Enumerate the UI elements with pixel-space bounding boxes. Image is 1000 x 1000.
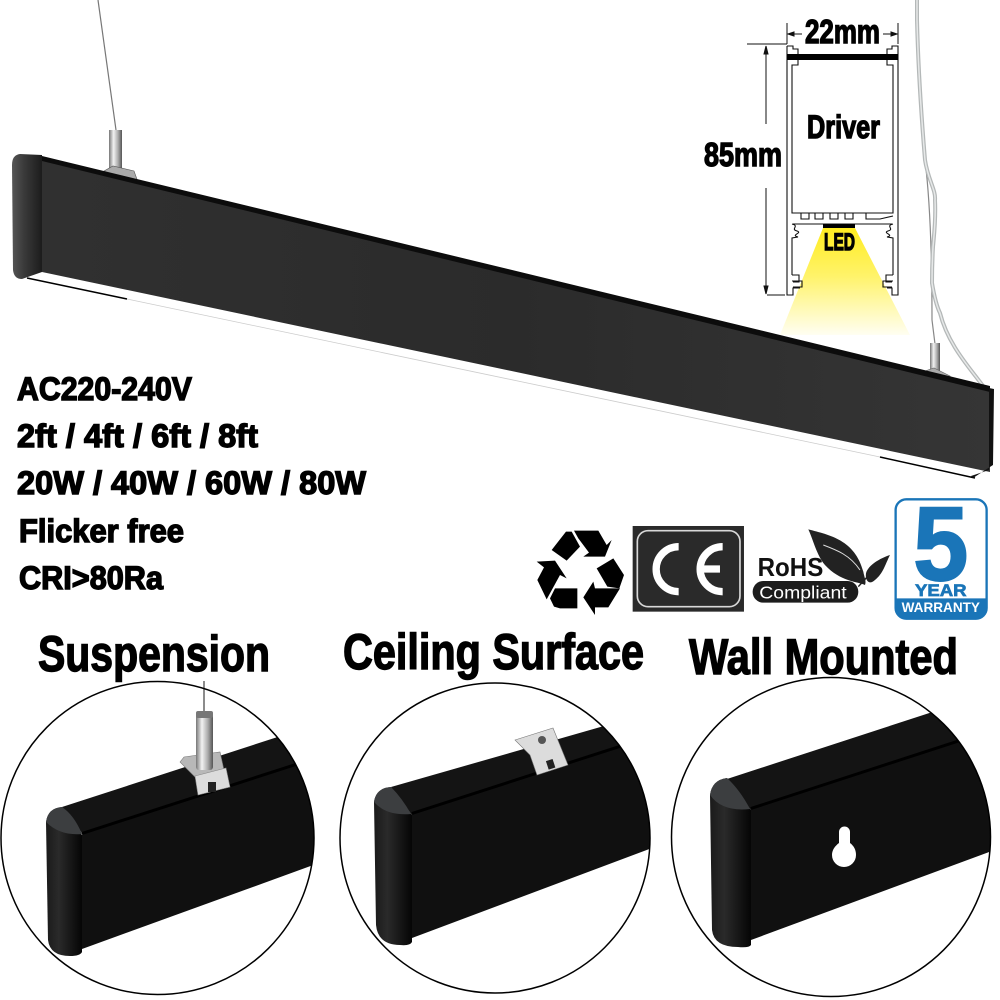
circle outline xyxy=(340,683,650,993)
cross-section diagram xyxy=(704,13,910,335)
top bar xyxy=(787,54,898,60)
lamp face xyxy=(82,766,314,949)
end cap xyxy=(46,807,82,956)
end cap top xyxy=(374,787,411,814)
aluminium profile xyxy=(787,46,898,295)
lamp face xyxy=(412,748,650,938)
dimension lines xyxy=(747,23,898,295)
end cap top xyxy=(710,778,750,809)
lamp top surface xyxy=(728,712,957,810)
end cap top xyxy=(46,807,82,834)
LED chip xyxy=(823,224,855,228)
label: LED: LED xyxy=(824,229,855,256)
circle outline xyxy=(672,678,990,996)
end cap xyxy=(374,787,412,945)
right end trim xyxy=(971,388,994,478)
end cap xyxy=(710,778,751,947)
heading: Ceiling Surface: Ceiling Surface xyxy=(343,624,644,680)
right suspension wire, clamp and power cable xyxy=(917,0,983,386)
specifications text xyxy=(17,371,367,596)
suspension clamp xyxy=(180,681,230,795)
numeral 5: 5 xyxy=(913,486,968,603)
panel: suspension detail xyxy=(1,681,330,994)
label: 22mm: 22mm xyxy=(805,13,880,50)
ceiling clip xyxy=(515,728,568,775)
lamp face xyxy=(751,742,990,940)
label: 85mm: 85mm xyxy=(704,136,782,173)
diffuser strip xyxy=(27,272,989,478)
flicker free: Flicker free xyxy=(19,513,184,549)
RoHS text: RoHS xyxy=(758,552,823,582)
label: Driver: Driver xyxy=(807,109,880,145)
Compliant pill xyxy=(753,581,858,603)
lamp top surface xyxy=(391,726,618,815)
lengths: 2ft / 4ft / 6ft / 8ft xyxy=(17,418,258,454)
YEAR: YEAR xyxy=(915,581,967,600)
icon: 5 year warranty xyxy=(896,486,987,619)
leaves xyxy=(808,529,866,585)
icon: RoHS compliant xyxy=(753,529,890,603)
voltage: AC220-240V xyxy=(17,371,193,407)
lamp top surface xyxy=(62,737,294,833)
icon: recycle xyxy=(537,531,624,615)
end cap xyxy=(12,154,42,279)
light beam xyxy=(780,228,910,335)
lamp body face xyxy=(42,157,990,472)
Compliant text: Compliant xyxy=(759,582,847,602)
heading: Suspension: Suspension xyxy=(38,626,270,682)
WARRANTY: WARRANTY xyxy=(902,599,981,615)
circle outline xyxy=(1,682,314,994)
top edge xyxy=(42,156,990,392)
keyhole slot xyxy=(832,827,856,867)
wattages: 20W / 40W / 60W / 80W xyxy=(17,465,367,501)
icon: CE mark xyxy=(633,526,744,612)
left suspension wire and clamp xyxy=(98,0,138,182)
CRI: CRI>80Ra xyxy=(19,560,163,596)
panel: wall mounted detail xyxy=(672,678,1000,996)
linear light fixture xyxy=(12,0,994,478)
panel: ceiling surface detail xyxy=(340,683,660,993)
